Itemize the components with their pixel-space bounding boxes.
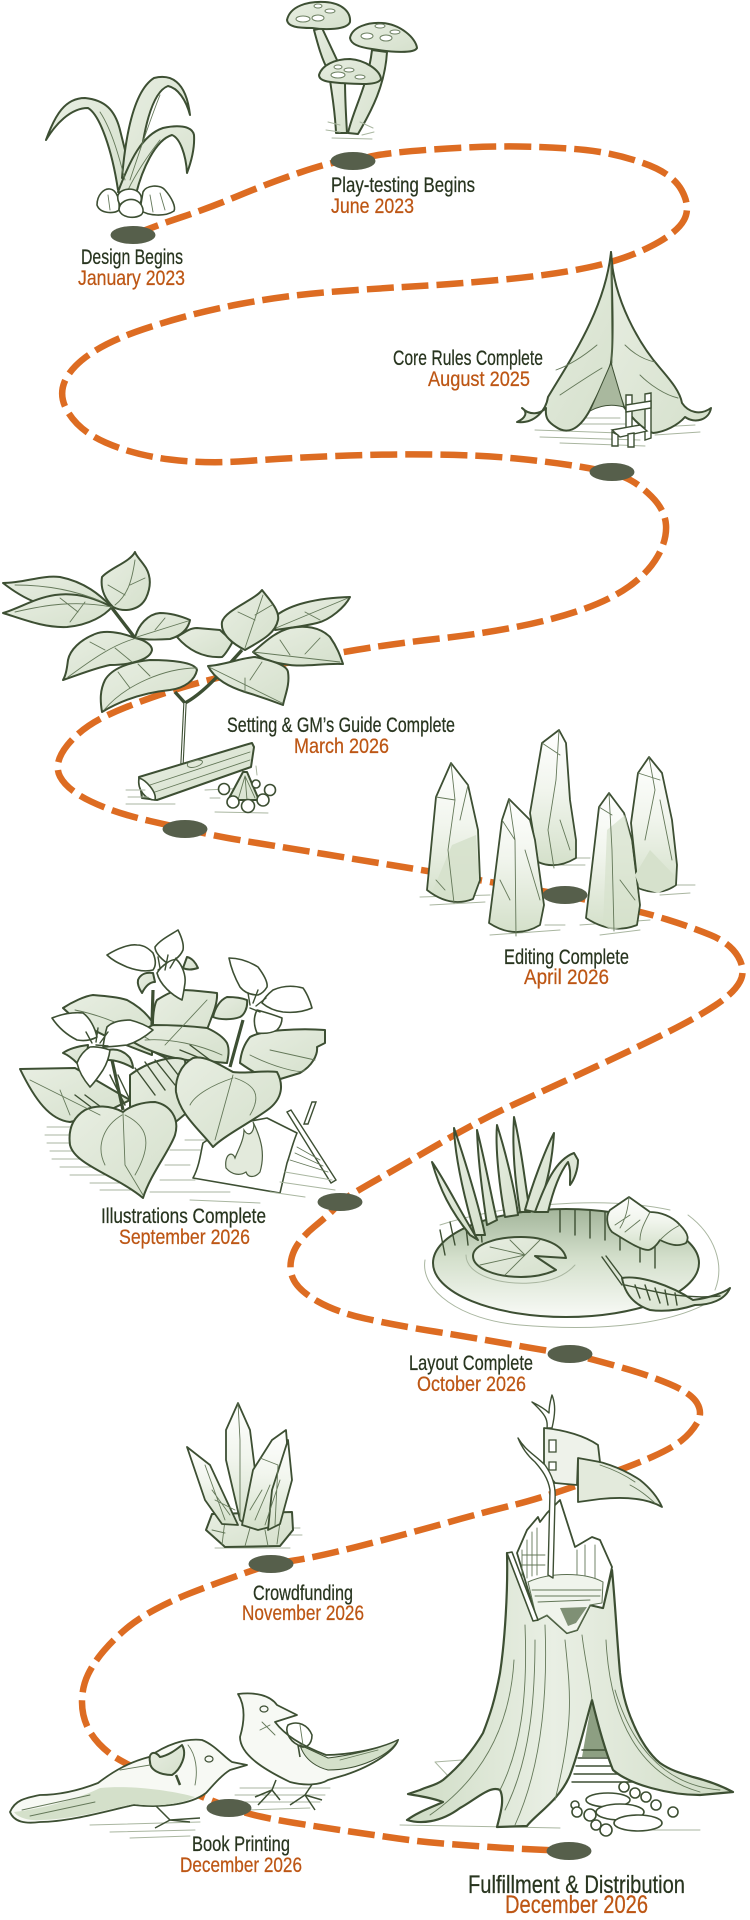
- label: Editing Complete: Editing Complete: [504, 945, 629, 969]
- label: Crowdfunding: Crowdfunding: [253, 1581, 353, 1605]
- milestone marker: Illustrations Complete: [318, 1193, 362, 1211]
- illustration: mushrooms: [287, 2, 417, 139]
- milestone marker: Editing Complete: [542, 886, 588, 904]
- illustration: pond with reeds, lily pad, rock and leaf: [425, 1117, 730, 1327]
- label: Book Printing: December 2026: [180, 1853, 302, 1877]
- illustration: broken tree stump with flag: [400, 1395, 733, 1836]
- illustration: trillium flowers and fire tag: [20, 930, 336, 1203]
- milestone marker: Play-testing Begins: [330, 152, 376, 170]
- label: Setting & GM's Guide Complete: [227, 713, 455, 758]
- illustration: two birds: [10, 1693, 398, 1838]
- label: Fulfillment & Distribution: [468, 1871, 685, 1919]
- label: Fulfillment & Distribution: Fulfillment & Distribution: [468, 1871, 685, 1899]
- milestone marker: Fulfillment and Distribution: [546, 1842, 592, 1860]
- label: Play-testing Begins: [331, 173, 475, 218]
- label: Play-testing Begins: June 2023: [331, 194, 414, 218]
- label: Design Begins: Design Begins: [81, 245, 183, 269]
- label: Setting & GM's Guide Complete: Setting & GM’s Guide Complete: [227, 713, 455, 737]
- label: Layout Complete: [409, 1351, 533, 1396]
- illustration: leafy sapling with log and campfire: [3, 552, 350, 813]
- label: Crowdfunding: [242, 1581, 364, 1625]
- label: Core Rules Complete: Core Rules Complete: [393, 346, 543, 370]
- label: Layout Complete: October 2026: [417, 1372, 526, 1396]
- label: Illustrations Complete: [101, 1204, 266, 1249]
- label: Core Rules Complete: [393, 346, 543, 391]
- label: Book Printing: [180, 1832, 302, 1877]
- label: Illustrations Complete: September 2026: [119, 1225, 250, 1249]
- illustration: crystal cluster: [187, 1403, 302, 1548]
- label: Design Begins: [78, 245, 185, 290]
- milestone marker: Layout Complete: [548, 1345, 592, 1363]
- illustration: grass and rocks: [46, 77, 194, 217]
- milestone marker: Book Printing: [206, 1799, 252, 1817]
- label: Editing Complete: [504, 945, 629, 989]
- label: Fulfillment & Distribution: December 2026: [505, 1891, 648, 1919]
- label: Editing Complete: April 2026: [524, 965, 609, 989]
- milestone marker: Setting and GM's Guide Complete: [162, 820, 208, 838]
- label: Play-testing Begins: Play-testing Begins: [331, 173, 475, 197]
- milestone marker: Design Begins: [110, 226, 156, 244]
- label: Layout Complete: Layout Complete: [409, 1351, 533, 1375]
- label: Core Rules Complete: August 2025: [428, 367, 530, 391]
- label: Book Printing: Book Printing: [192, 1832, 290, 1856]
- label: Crowdfunding: November 2026: [242, 1601, 364, 1625]
- label: Illustrations Complete: Illustrations Complete: [101, 1204, 266, 1228]
- illustration: leaf tent with chair: [517, 252, 711, 447]
- label: Setting & GM's Guide Complete: March 2026: [294, 734, 389, 758]
- milestone marker: Core Rules Complete: [590, 463, 634, 481]
- milestone marker: Crowdfunding: [248, 1555, 294, 1573]
- label: Design Begins: January 2023: [78, 266, 185, 290]
- illustration: standing crystals: [420, 730, 695, 936]
